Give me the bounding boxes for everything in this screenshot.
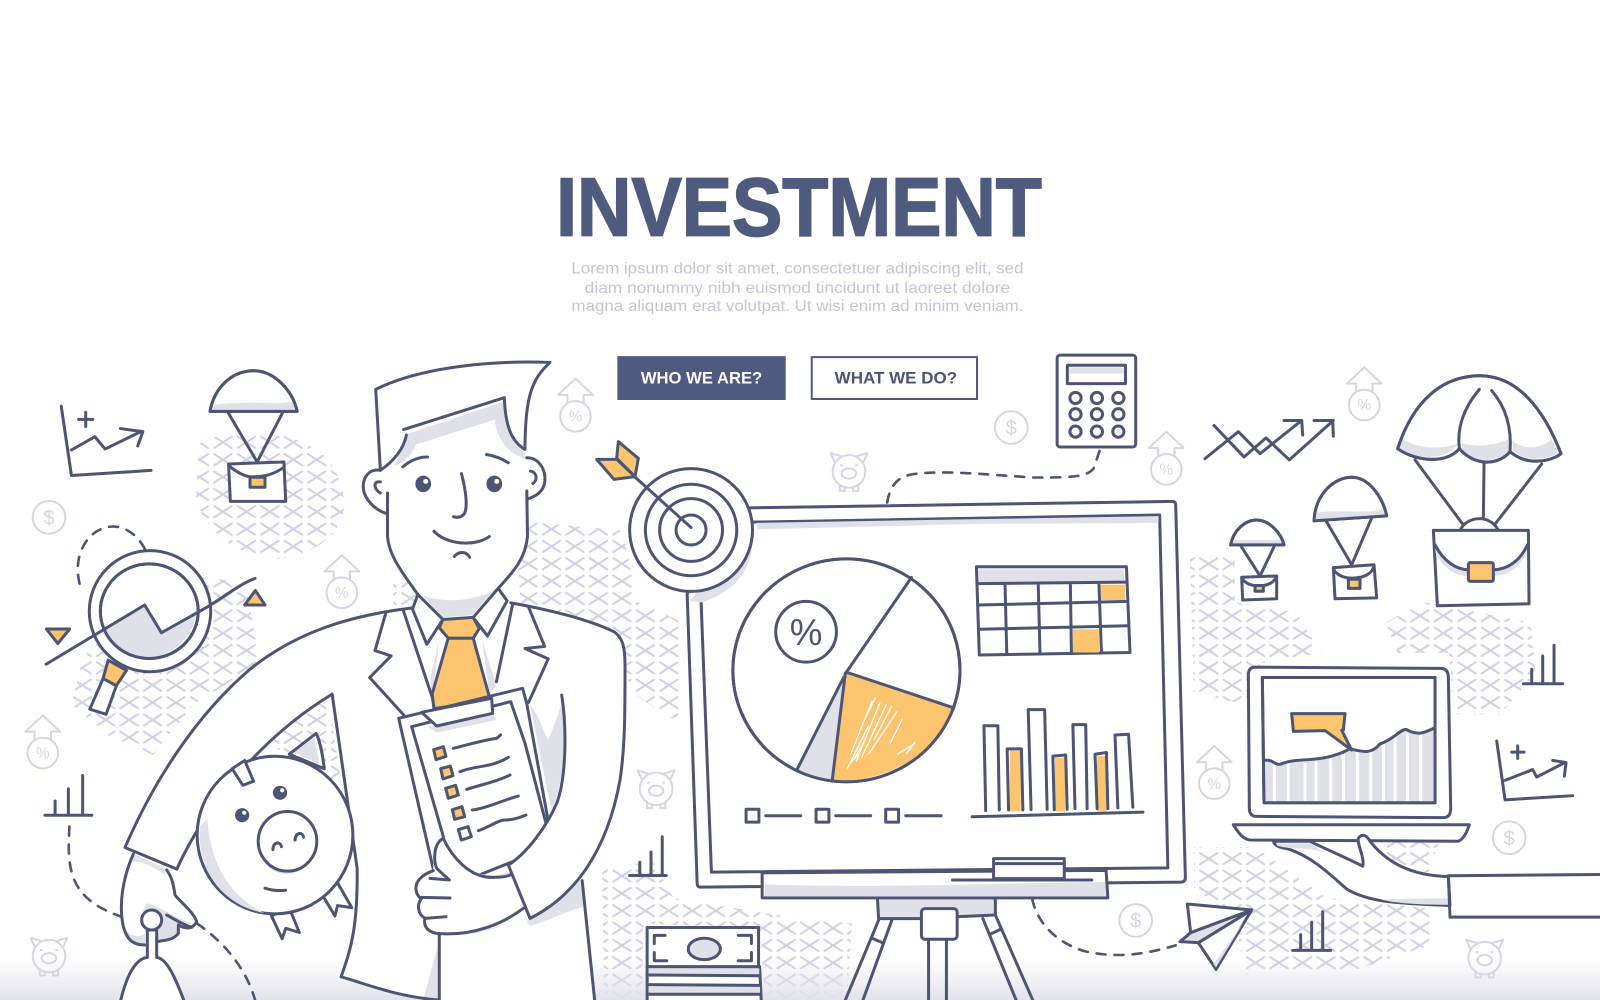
legend xyxy=(746,809,941,822)
hair shadow xyxy=(395,402,525,466)
piggy bank xyxy=(197,733,353,939)
target xyxy=(630,469,752,602)
icon: magnifier with chart xyxy=(46,527,265,714)
faint icons: dollar coins: $ xyxy=(1006,418,1018,440)
faint icons: percent arrows: % xyxy=(335,585,349,602)
subtitle text: magna aliquam erat volutpat. Ut wisi enim ad minim veniam. xyxy=(571,298,1023,315)
arrow fletching xyxy=(597,442,638,479)
suit shadows xyxy=(423,640,496,1000)
tray xyxy=(1233,825,1469,841)
left hand with joystick xyxy=(120,854,197,1000)
calculator xyxy=(1057,355,1136,447)
presentation board xyxy=(630,451,1185,1000)
forearm and hand xyxy=(416,838,530,934)
laptop on tray xyxy=(1233,667,1469,841)
bar chart xyxy=(972,710,1143,817)
hair xyxy=(376,362,550,470)
subtitle text: diam nonummy nibh euismod tincidunt ut laoreet dolore xyxy=(585,280,1010,297)
sleeve xyxy=(508,666,625,918)
hair lines xyxy=(376,362,550,470)
button: who we are: WHO WE ARE? xyxy=(641,369,762,388)
head xyxy=(386,433,528,617)
icon: zigzag arrows xyxy=(1205,420,1333,460)
tray xyxy=(762,859,1108,898)
faint icons: percent arrows: % xyxy=(1357,397,1371,414)
right side group xyxy=(1205,376,1600,950)
subtitle text: Lorem ipsum dolor sit amet, consectetuer adipiscing elit, sed xyxy=(571,260,1023,277)
icon: parachute with briefcase top left xyxy=(210,371,297,501)
icon: paper plane xyxy=(1180,904,1252,969)
icon: growth chart left xyxy=(61,406,151,476)
background: cross-hatch patches xyxy=(71,432,1536,1000)
man figure xyxy=(125,362,625,1000)
money stack xyxy=(647,928,761,1000)
lapels xyxy=(370,605,548,715)
button: what we do: WHAT WE DO? xyxy=(835,369,957,388)
title: INVESTMENT xyxy=(556,161,1042,254)
neck shadow xyxy=(421,588,496,617)
icon: large parachute xyxy=(1398,376,1561,606)
clipboard board xyxy=(399,688,548,880)
clip xyxy=(422,698,497,733)
torso lines xyxy=(439,881,595,1000)
bottom grey fade xyxy=(0,959,1600,1000)
right shoulder xyxy=(511,603,625,665)
jacket shadows xyxy=(437,702,583,935)
faint icons: dollar coins: $ xyxy=(43,507,55,529)
faint icons: percent arrows: % xyxy=(569,408,583,425)
faint icons: percent arrows: % xyxy=(1207,776,1221,793)
body silhouette xyxy=(125,588,625,1000)
faint icons: percent arrows xyxy=(26,367,1382,799)
faint icons: dollar coins: $ xyxy=(1504,828,1516,850)
icon: mini bars right xyxy=(1523,645,1563,684)
collar xyxy=(413,595,443,644)
screen area chart xyxy=(1264,728,1435,803)
face details xyxy=(403,454,508,557)
subtitle text xyxy=(571,260,1023,315)
calendar table xyxy=(976,567,1130,655)
faint icons: dollar coins: $ xyxy=(1130,911,1142,933)
ears xyxy=(363,458,545,514)
dashed line to paper plane xyxy=(1032,899,1176,955)
icon: medium parachute xyxy=(1314,477,1387,599)
hand under tray xyxy=(1273,835,1600,917)
screen xyxy=(701,515,1168,872)
clipboard, hand and sleeve xyxy=(399,666,625,935)
callout xyxy=(1292,714,1352,750)
icon: mini bars lower xyxy=(1293,912,1331,950)
checklist xyxy=(434,735,526,840)
faint icons: piggy banks xyxy=(31,453,1503,978)
dashed path: lower left xyxy=(69,827,255,1000)
dashed line to calculator xyxy=(887,451,1100,502)
left arm xyxy=(125,608,439,1000)
icon: small parachute xyxy=(1231,520,1284,600)
eyes xyxy=(415,476,502,492)
tie xyxy=(432,617,491,709)
button: who we are xyxy=(617,356,786,400)
faint icons: percent arrows: % xyxy=(1160,461,1174,478)
easel legs xyxy=(844,899,1035,1000)
icon: chart right xyxy=(1497,741,1573,800)
percent symbol in pie: % xyxy=(790,612,822,653)
faint icons: percent arrows: % xyxy=(36,745,50,762)
board frame xyxy=(687,501,1185,887)
faint icons: dollar coins xyxy=(33,411,1526,937)
pie chart xyxy=(733,559,960,782)
face outline xyxy=(388,491,528,595)
icon: mini bars left xyxy=(45,776,92,815)
button: what we do xyxy=(812,357,977,399)
icon: mini bars center xyxy=(630,837,666,876)
